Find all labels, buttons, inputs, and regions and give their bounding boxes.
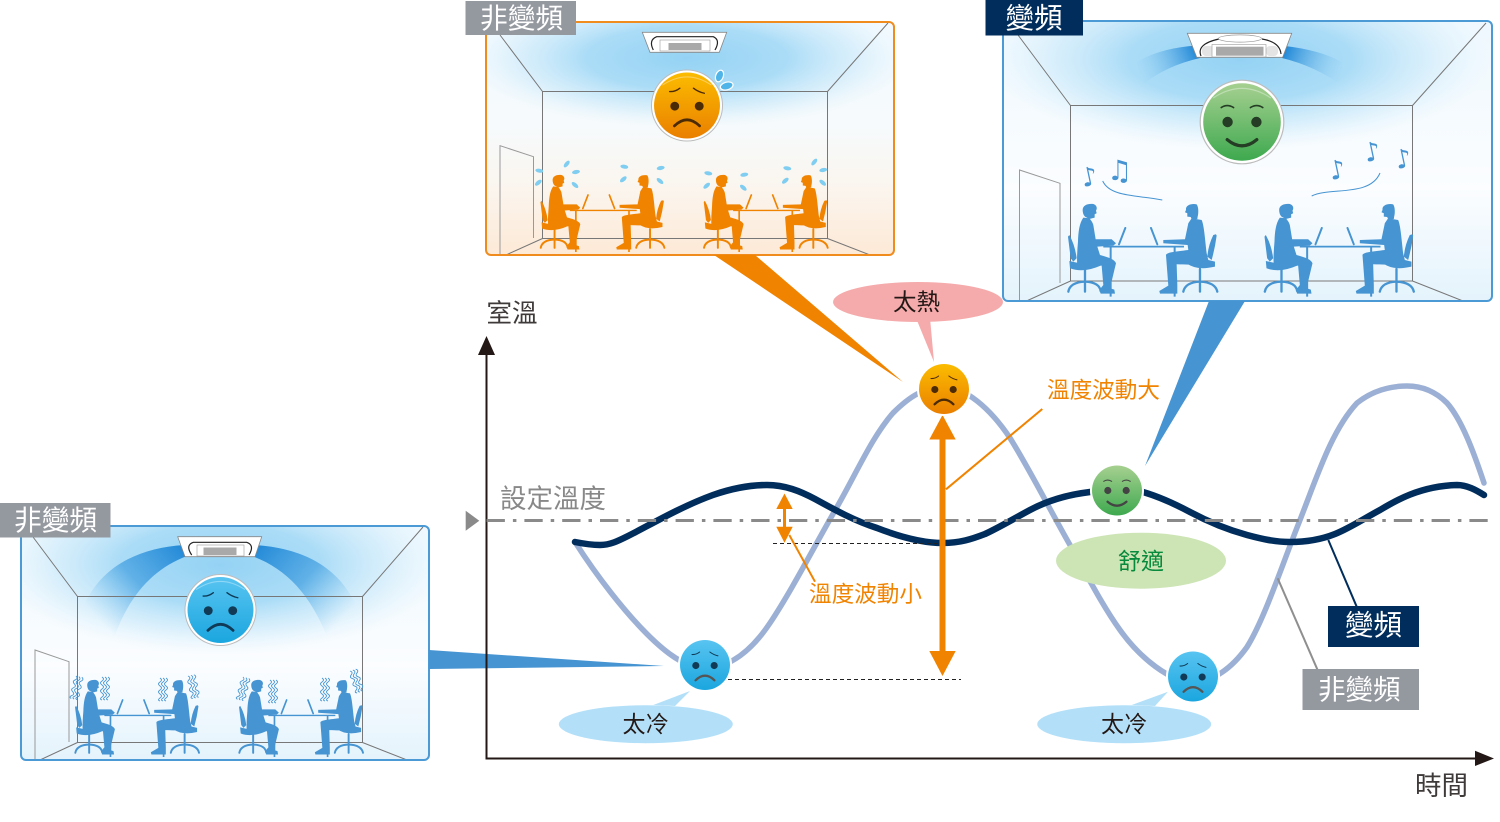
label: set temperature: 設定溫度 (500, 484, 606, 514)
leader: large swing label (946, 409, 1042, 489)
people: meeting pair two, sweating (704, 175, 828, 252)
label: small temperature swing: 溫度波動小 (809, 582, 922, 607)
panel: non-inverter too hot room (485, 21, 895, 256)
people: meeting pair two, shivering (239, 680, 363, 757)
panel: inverter comfortable room (990, 0, 1492, 301)
pointer: left room to cold face (429, 650, 664, 669)
legend: inverter (1328, 540, 1419, 647)
bubble: too hot: 太熱 (893, 289, 940, 315)
icon: sweat drops (534, 158, 828, 192)
legend: non-inverter: 非變頻 (1318, 674, 1400, 705)
line: non-inverter temperature curve (575, 386, 1484, 682)
icon: ceiling air conditioner (178, 537, 262, 557)
leader: small swing label (789, 535, 815, 582)
bubble: too hot (833, 282, 1003, 362)
icon: music notes and waves: ♪ (1078, 161, 1101, 194)
label: non-inverter tag, left room (0, 503, 110, 538)
icon: music notes and waves: ♪ (1326, 154, 1349, 187)
label: non-inverter tag, top room: 非變頻 (480, 3, 563, 34)
guides: range markers (728, 544, 961, 680)
line: inverter temperature curve (575, 485, 1484, 545)
label: large temperature swing: 溫度波動大 (1047, 378, 1160, 403)
pointer: inverter room to happy face (1145, 301, 1245, 466)
icon: large hot sad face (651, 69, 723, 142)
pointer: hot room to hot face (714, 255, 903, 382)
icon: music notes and waves: ♫ (1107, 154, 1132, 187)
bubble: too cold left: 太冷 (622, 711, 668, 737)
marker: set temperature triangle (466, 511, 479, 531)
legend: non-inverter (1278, 578, 1419, 710)
bubble: comfortable (1056, 533, 1226, 589)
label: non-inverter tag, left room: 非變頻 (14, 505, 97, 536)
face: comfortable inverter (1090, 463, 1144, 518)
bubble: comfortable: 舒適 (1118, 548, 1164, 574)
people: meeting pair one, sweating (540, 175, 664, 252)
face: hot peak (917, 362, 971, 416)
axes: temperature and time (478, 336, 1494, 766)
legend: inverter: 變頻 (1345, 610, 1402, 642)
icon: shiver marks (70, 669, 364, 703)
icon: music notes and waves (1078, 136, 1415, 200)
label: inverter tag, top room (986, 0, 1083, 36)
people: meeting pair one, relaxed (1068, 204, 1217, 297)
label: inverter tag, top room: 變頻 (1006, 3, 1063, 35)
face: cold trough left (678, 638, 732, 692)
label: non-inverter tag, top room (466, 1, 576, 35)
icon: forehead sweat drops (714, 69, 734, 91)
bubble: too cold left (559, 691, 733, 743)
people: meeting pair one, shivering (75, 680, 199, 757)
icon: large happy face (1200, 80, 1284, 164)
icon: ceiling air conditioner (1187, 33, 1292, 57)
icon: music notes and waves: ♪ (1361, 136, 1384, 169)
line: set temperature reference (487, 519, 1492, 522)
panel: non-inverter too cold room (20, 525, 430, 761)
bubble: too cold right (1037, 692, 1211, 743)
bubble: too cold right: 太冷 (1101, 711, 1147, 737)
arrow: small temperature swing (776, 494, 793, 543)
face: cold trough right (1166, 649, 1220, 704)
arrow: large temperature swing (929, 415, 956, 676)
icon: music notes and waves: ♪ (1392, 143, 1415, 176)
people: meeting pair two, relaxed (1264, 204, 1414, 297)
icon: ceiling air conditioner (642, 32, 727, 52)
icon: large cold sad face (184, 574, 257, 646)
axis label: time: 時間 (1415, 771, 1468, 801)
chart: room temperature over time (466, 282, 1494, 801)
axis label: room temperature: 室溫 (486, 300, 538, 328)
